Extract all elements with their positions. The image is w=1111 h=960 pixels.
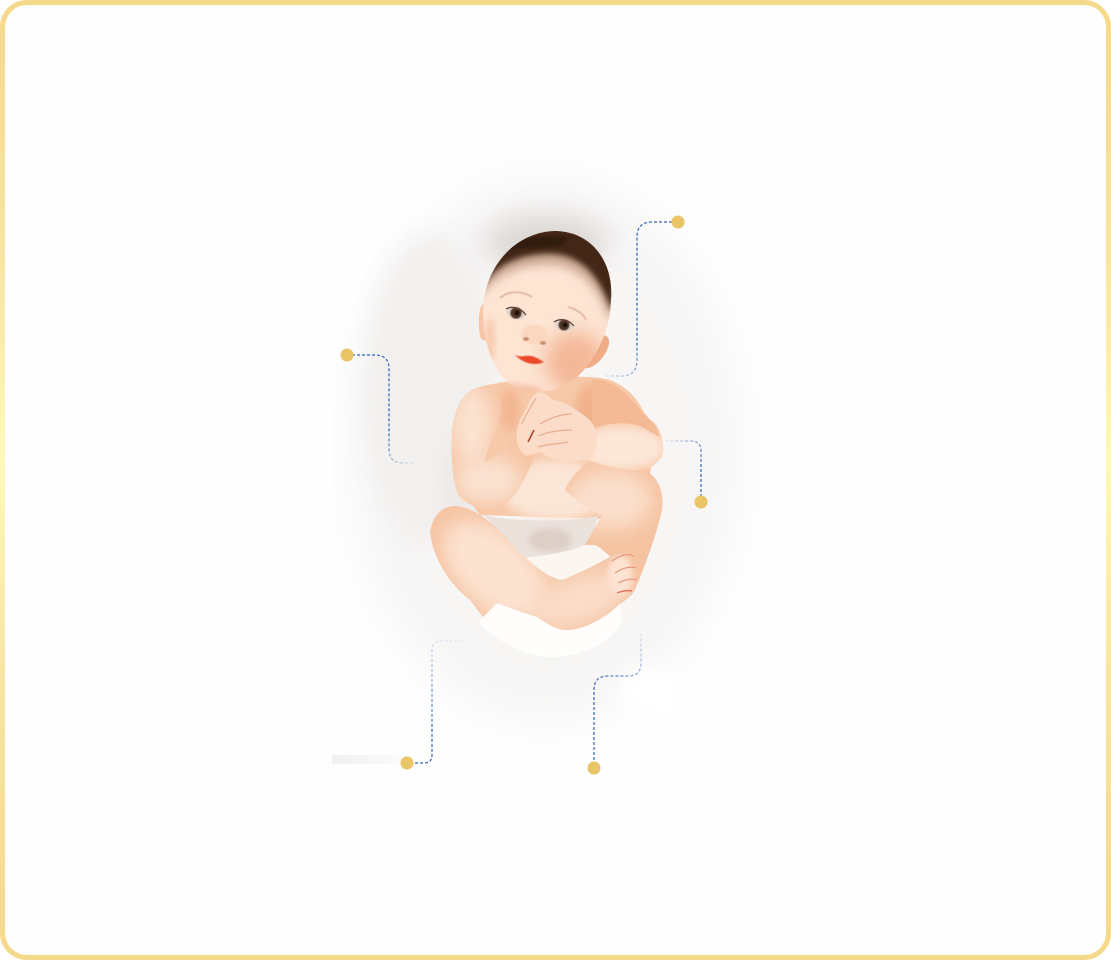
eyebrows [500, 292, 586, 320]
baby left arm [452, 388, 534, 507]
baby right forearm [586, 420, 664, 470]
marker dot [400, 756, 414, 770]
marker dot [340, 348, 354, 362]
diaper waistband [484, 515, 598, 558]
diaper back white [478, 602, 622, 657]
diaper front white [526, 545, 612, 580]
baby right ear [584, 335, 609, 368]
baby right upper arm [592, 380, 660, 437]
baby torso [452, 377, 655, 520]
baby [430, 231, 664, 630]
nose [522, 325, 547, 345]
eyes [505, 305, 527, 321]
toes [612, 555, 637, 593]
mouth [515, 355, 544, 364]
baby left leg and foot [430, 506, 636, 630]
callout line top right [604, 216, 684, 376]
callout line bottom left [400, 641, 462, 770]
baby hands [517, 392, 597, 461]
baby right thigh [565, 462, 662, 585]
callout line right [665, 441, 708, 508]
baby head with hair and face [483, 231, 612, 392]
marker dot [588, 762, 600, 774]
photo background: soft sheet [332, 178, 741, 764]
callout line left [340, 348, 414, 463]
marker dot [672, 216, 684, 228]
baby left ear [479, 303, 488, 341]
callout line bottom centre [588, 634, 641, 774]
marker dot [694, 496, 708, 508]
